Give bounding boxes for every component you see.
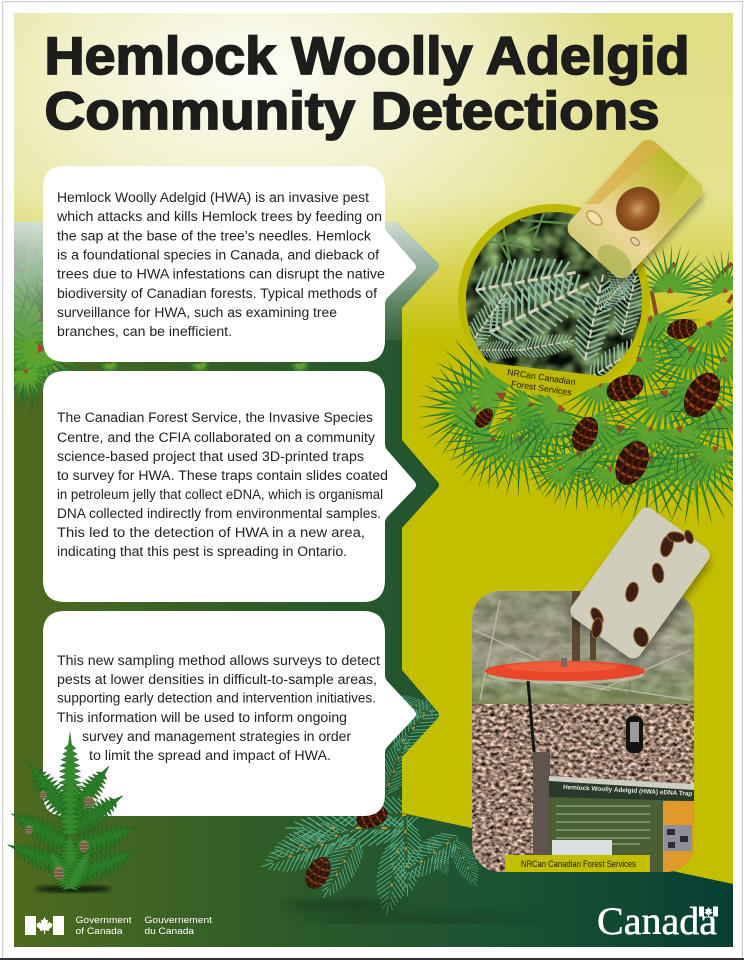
callout: the community science project: The Canadian Forest Service, the Invasive Species <box>57 410 373 425</box>
adelgid sample slide photo <box>567 504 713 662</box>
English name <box>76 915 132 937</box>
callout: the community science project: indicating that this pest is spreading in Ontario. <box>57 544 347 559</box>
photo caption: NRCan Canadian <box>507 367 576 387</box>
needles in left strip <box>14 245 314 412</box>
teal sprays at the bottom <box>261 696 478 915</box>
title: Hemlock Woolly Adelgid <box>44 27 690 86</box>
callout: what is HWA: biodiversity of Canadian forests. Typical methods of <box>57 286 377 301</box>
callout: what is HWA: Hemlock Woolly Adelgid (HWA) is an invasive pest <box>57 190 369 205</box>
callout: what is HWA: which attacks and kills Hemlock trees by feeding on <box>56 209 382 224</box>
forest background <box>472 591 694 704</box>
callout: the community science project: science-based project that used 3D-printed traps <box>57 449 364 464</box>
callout: the community science project: DNA collected indirectly from environmental samples. <box>57 506 381 521</box>
Canada wordmark: Canada <box>597 900 717 943</box>
callout: why the method matters: This information will be used to inform ongoing <box>57 710 347 725</box>
pine needles clipped in the band <box>0 185 486 918</box>
callout: the community science project: in petroleum jelly that collect eDNA, which is organismal <box>57 487 383 502</box>
hemlock photo <box>466 212 642 376</box>
callout: why the method matters: pests at lower densities in difficult-to-sample areas, <box>57 672 377 687</box>
leaf litter <box>472 704 694 872</box>
callout: what is HWA: branches, can be inefficient. <box>57 324 232 339</box>
callout: the community science project <box>43 371 416 602</box>
red trap disc <box>485 658 645 684</box>
ground shadows under bottom spray <box>285 900 540 922</box>
callout: why the method matters: This new sampling method allows surveys to detect <box>57 653 380 668</box>
large pine branch with cones <box>404 238 744 534</box>
pine cones <box>471 317 728 490</box>
photo caption <box>505 855 650 872</box>
callout: why the method matters <box>43 611 416 816</box>
small spruce tree <box>3 732 141 893</box>
flag symbol <box>25 916 64 935</box>
Government of Canada signature <box>25 915 212 937</box>
callout: what is HWA: surveillance for HWA, such as examining tree <box>57 305 337 320</box>
circle ring <box>458 204 650 396</box>
French name: Gouvernement <box>144 915 212 926</box>
English name: Government <box>76 915 132 926</box>
callout: why the method matters: to limit the spread and impact of HWA. <box>89 748 331 763</box>
callout: the community science project: Centre, and the CFIA collaborated on a community <box>57 430 375 445</box>
dark green chevron band and ground <box>14 222 733 947</box>
photo caption: NRCan Canadian Forest Services <box>521 858 636 869</box>
callout: what is HWA: trees due to HWA infestations can disrupt the native <box>57 266 385 282</box>
photo caption: Forest Services <box>510 379 573 398</box>
trap photo <box>472 591 694 872</box>
photo caption <box>507 367 576 398</box>
English name: of Canada <box>76 926 123 937</box>
cones on bottom spray <box>305 856 331 890</box>
circular hemlock photo with caption <box>458 204 660 398</box>
fade over top of band <box>14 222 444 340</box>
insect close-up photo <box>562 135 707 283</box>
callout: what is HWA: the sap at the base of the tree’s needles. Hemlock <box>57 228 371 244</box>
French name <box>144 915 212 937</box>
wooden post <box>533 752 550 862</box>
callout: what is HWA <box>43 166 416 362</box>
information sign: Hemlock Woolly Adelgid (HWA) eDNA Trap <box>563 784 693 798</box>
callout: what is HWA: is a foundational species in Canada, and dieback of <box>57 248 379 262</box>
callout: why the method matters: survey and management strategies in order <box>82 729 352 744</box>
hanging tag <box>626 681 643 753</box>
black rod <box>528 681 534 752</box>
callout: the community science project: to survey for HWA. These traps contain slides coated <box>57 468 388 483</box>
tree ground shadow <box>35 886 111 892</box>
title <box>44 27 690 141</box>
information sign <box>549 776 694 872</box>
twigs <box>652 263 733 323</box>
title: Community Detections <box>44 82 660 141</box>
callout: the community science project: This led to the detection of HWA in a new area, <box>57 525 365 540</box>
callout: why the method matters: supporting early detection and intervention initiatives. <box>57 690 376 706</box>
French name: du Canada <box>144 926 195 937</box>
